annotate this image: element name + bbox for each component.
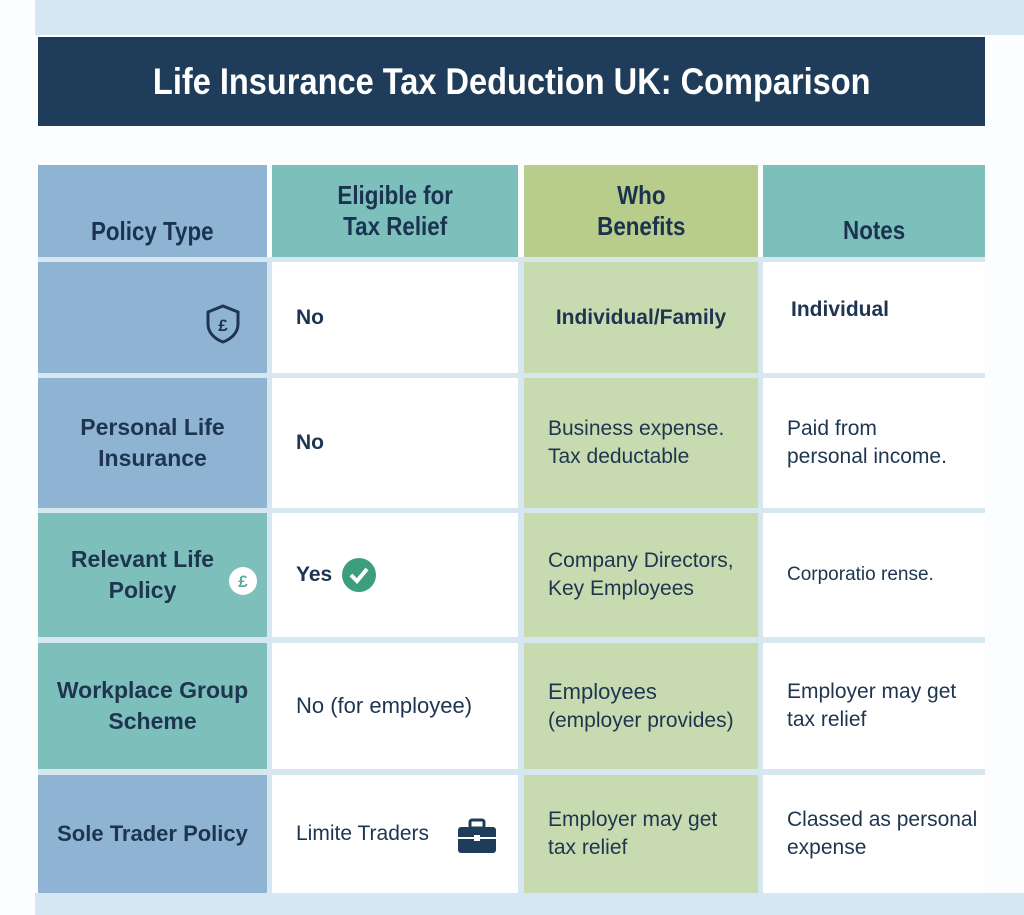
separators bbox=[38, 257, 985, 893]
icon: check bbox=[342, 558, 376, 592]
row 4 bbox=[38, 643, 985, 769]
eligible: No: No bbox=[296, 306, 324, 328]
notes: Employer may get bbox=[787, 680, 956, 703]
header: eligible: Tax Relief bbox=[343, 211, 447, 241]
header: eligible bbox=[272, 165, 518, 257]
title bar: Life Insurance Tax Deduction UK: Comparison bbox=[153, 60, 870, 102]
header: who benefits: Who bbox=[617, 180, 665, 210]
policy: Relevant Life bbox=[71, 546, 214, 572]
benefits bbox=[524, 262, 758, 373]
notes: tax relief bbox=[787, 708, 866, 731]
benefits: Business expense. bbox=[548, 417, 724, 440]
row 5 bbox=[38, 775, 985, 893]
benefits bbox=[524, 643, 758, 769]
eligible: No (for employee) bbox=[296, 693, 472, 718]
notes bbox=[763, 513, 985, 637]
title bar bbox=[38, 37, 985, 126]
eligible: No bbox=[272, 262, 518, 373]
eligible bbox=[272, 775, 518, 893]
benefits: Company Directors, bbox=[548, 549, 734, 572]
row 2 bbox=[38, 378, 985, 508]
header: who benefits: Benefits bbox=[597, 211, 685, 241]
notes: Corporatio rense. bbox=[787, 564, 934, 585]
header: notes: Notes bbox=[843, 214, 905, 244]
header: policy type: Policy Type bbox=[91, 216, 214, 246]
eligible bbox=[272, 378, 518, 508]
row 3 bbox=[38, 513, 985, 637]
policy bbox=[38, 775, 267, 893]
benefits: Employees bbox=[548, 678, 657, 704]
icon: pound coin: £ bbox=[238, 572, 248, 590]
header: eligible: Eligible for bbox=[337, 180, 453, 210]
header: notes bbox=[763, 165, 985, 257]
benefits: tax relief bbox=[548, 836, 627, 859]
benefits bbox=[524, 775, 758, 893]
bottom band bbox=[35, 893, 1024, 915]
benefits: Individual/Family bbox=[556, 306, 726, 328]
icon: pound coin bbox=[229, 567, 257, 595]
benefits: Key Employees bbox=[548, 577, 694, 600]
icon: shield pound bbox=[38, 262, 267, 373]
notes bbox=[763, 262, 985, 373]
policy: Sole Trader Policy bbox=[57, 821, 248, 846]
policy: Personal Life bbox=[80, 414, 225, 440]
header row bbox=[38, 165, 985, 257]
notes: Individual bbox=[791, 298, 889, 320]
notes: Paid from bbox=[787, 417, 877, 440]
benefits bbox=[524, 513, 758, 637]
notes: personal income. bbox=[787, 445, 947, 468]
icon: briefcase bbox=[458, 818, 496, 853]
eligible bbox=[272, 643, 518, 769]
policy bbox=[38, 643, 267, 769]
policy: Policy bbox=[109, 577, 176, 603]
notes bbox=[763, 643, 985, 769]
policy: Workplace Group bbox=[57, 677, 248, 703]
policy: Insurance bbox=[98, 445, 207, 471]
notes: expense bbox=[787, 836, 866, 859]
top band bbox=[35, 0, 1024, 35]
benefits bbox=[524, 378, 758, 508]
eligible: No bbox=[296, 431, 324, 454]
benefits: (employer provides) bbox=[548, 708, 734, 732]
icon: shield pound: £ bbox=[218, 316, 228, 335]
header: who benefits bbox=[524, 165, 758, 257]
notes bbox=[763, 775, 985, 893]
notes bbox=[763, 378, 985, 508]
row 1 bbox=[38, 262, 985, 373]
benefits: Employer may get bbox=[548, 808, 717, 831]
benefits: Tax deductable bbox=[548, 445, 689, 468]
header: policy type bbox=[38, 165, 267, 257]
policy bbox=[38, 378, 267, 508]
eligible bbox=[272, 513, 518, 637]
policy bbox=[38, 513, 267, 637]
policy: Scheme bbox=[108, 708, 197, 734]
eligible: Limite Traders bbox=[296, 822, 429, 845]
eligible: Yes bbox=[296, 563, 332, 586]
notes: Classed as personal bbox=[787, 808, 977, 831]
